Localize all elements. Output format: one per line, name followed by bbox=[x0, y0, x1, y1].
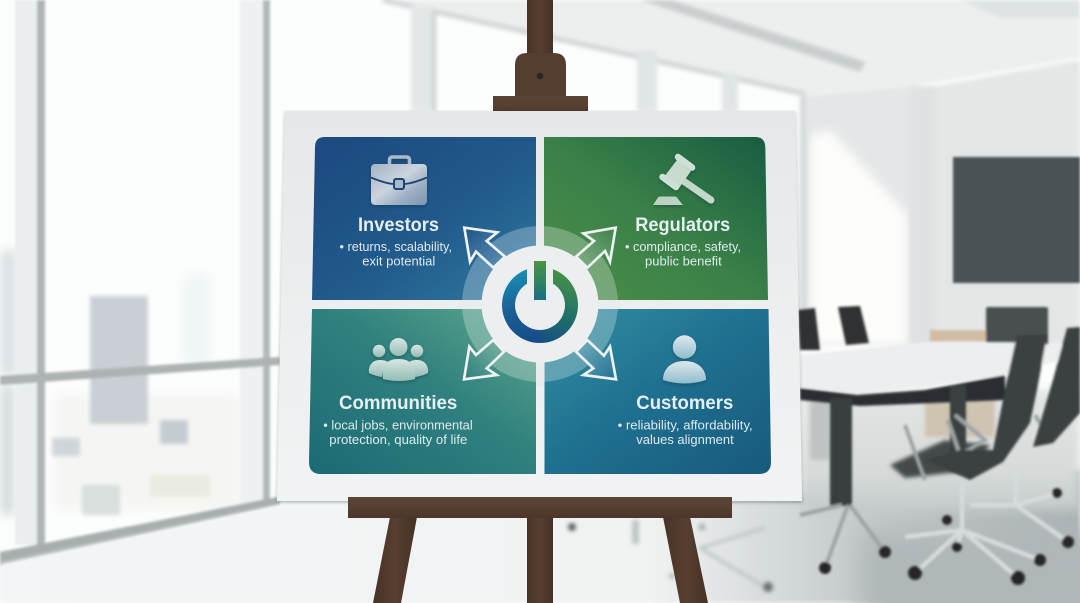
ceiling and upper window band bbox=[383, 0, 1080, 111]
arrow: top-left to investors bbox=[464, 228, 505, 268]
icon: briefcase bbox=[371, 157, 427, 205]
center white circle bbox=[482, 246, 598, 362]
text: regulator priorities: • compliance, safety, bbox=[625, 240, 741, 254]
right wall and column bbox=[800, 60, 1080, 346]
blurred city skyline bbox=[0, 250, 240, 515]
heading: Customers: Customers bbox=[636, 393, 733, 414]
text: regulator priorities: public benefit bbox=[645, 255, 722, 269]
text: community priorities: • local jobs, environmental bbox=[323, 418, 473, 432]
left window frames bbox=[15, 0, 270, 548]
heading: Regulators: Regulators bbox=[635, 215, 730, 236]
heading: Communities: Communities bbox=[339, 393, 457, 414]
wall-mounted screen bbox=[953, 157, 1080, 283]
window mullion and sill bbox=[0, 357, 280, 566]
text: regulator priorities bbox=[625, 240, 741, 269]
heading: Investors: Investors bbox=[358, 215, 439, 236]
arrow: top-right to regulators bbox=[576, 228, 616, 268]
icon: gavel bbox=[653, 157, 711, 205]
text: investor priorities bbox=[340, 240, 452, 269]
panel: communities bbox=[309, 309, 536, 474]
text: community priorities bbox=[323, 418, 473, 447]
text: investor priorities: • returns, scalability, bbox=[340, 240, 452, 254]
conference table and chairs bbox=[798, 306, 1080, 585]
panel: investors bbox=[312, 137, 536, 300]
icon: person bbox=[663, 335, 706, 384]
floor bbox=[0, 470, 1080, 603]
text: customer priorities: values alignment bbox=[636, 433, 734, 447]
panel gutters bbox=[458, 222, 622, 387]
faint chair legs under the board bbox=[568, 520, 773, 592]
icon: power symbol bbox=[502, 261, 578, 343]
text: customer priorities bbox=[618, 418, 753, 447]
text: investor priorities: exit potential bbox=[362, 255, 435, 269]
center halo bbox=[462, 226, 618, 382]
easel: lower ledge and legs bbox=[348, 497, 732, 603]
text: customer priorities: • reliability, affordability, bbox=[618, 418, 753, 432]
arrow: bottom-left to communities bbox=[464, 340, 504, 379]
text: community priorities: protection, quality of life bbox=[329, 433, 467, 447]
arrow: bottom-right to customers bbox=[576, 340, 616, 379]
easel: upper post and bracket bbox=[493, 0, 588, 115]
icon: people group bbox=[369, 338, 428, 381]
presentation board bbox=[277, 111, 802, 501]
panel: customers bbox=[544, 309, 771, 474]
panel: regulators bbox=[544, 137, 768, 300]
